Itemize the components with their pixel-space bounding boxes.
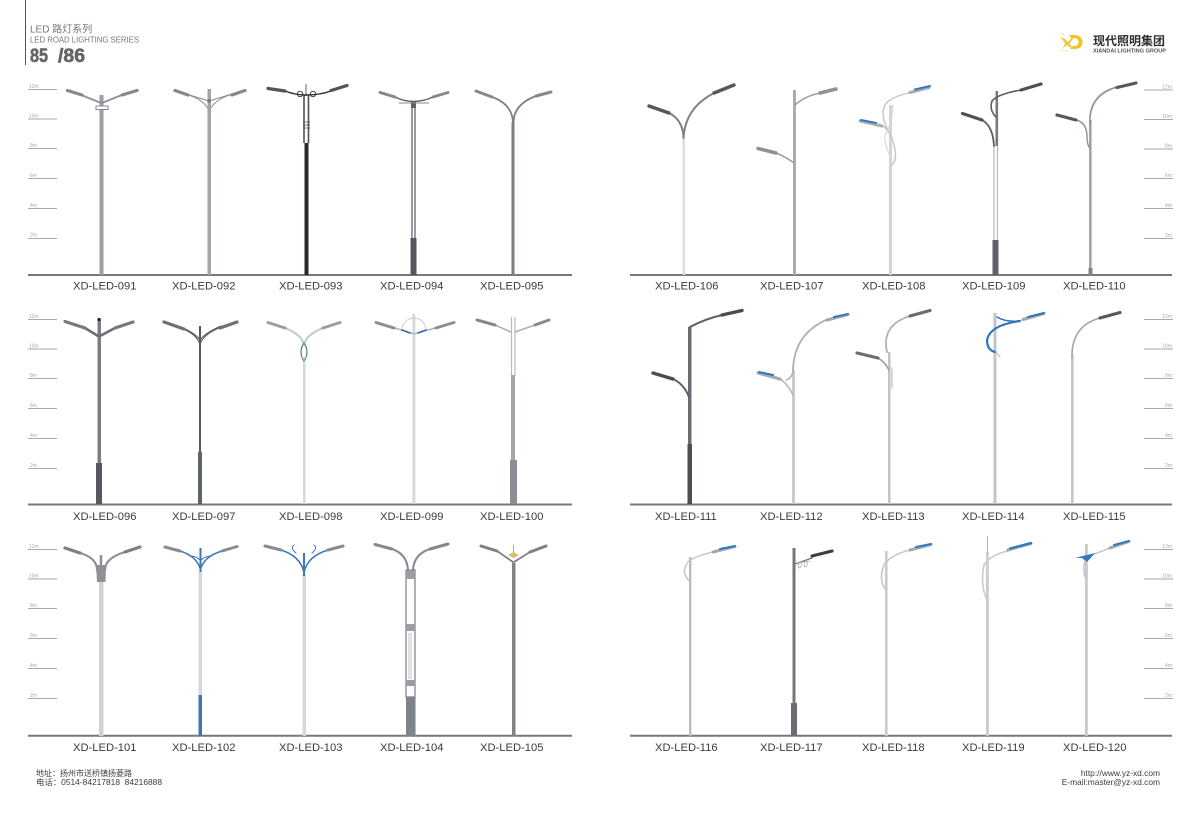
footer: address and phone: 电话：0514-84217818 84216888 <box>36 777 163 787</box>
lamp XD-LED-112 <box>758 314 848 504</box>
lamp XD-LED-113 <box>857 310 930 504</box>
label XD-LED-116: XD-LED-116 <box>655 742 718 754</box>
lamp XD-LED-092 <box>175 89 245 275</box>
row 3 right: ground line and height scale: 6m <box>1165 633 1172 639</box>
lamp XD-LED-118 <box>881 544 931 736</box>
row 3 right: ground line and height scale: 2m <box>1165 693 1172 699</box>
footer: website and email <box>1062 768 1160 787</box>
row 3 right: ground line and height scale <box>630 544 1173 736</box>
label XD-LED-120: XD-LED-120 <box>1063 742 1126 754</box>
row 3 left: ground line and height scale: 6m <box>30 633 37 639</box>
row 1 right: ground line and height scale: 4m <box>1165 203 1172 209</box>
lamp XD-LED-100 <box>477 317 549 504</box>
lamp XD-LED-106 <box>649 85 734 275</box>
footer: address and phone <box>36 768 163 787</box>
row 2 right: ground line and height scale: 12m <box>1162 314 1172 320</box>
row 3 left: ground line and height scale: 2m <box>30 693 37 699</box>
row 3 left: ground line and height scale <box>28 544 572 736</box>
row 2 left: ground line and height scale <box>28 314 572 504</box>
label XD-LED-095: XD-LED-095 <box>480 280 543 292</box>
row 1 right: ground line and height scale: 12m <box>1162 84 1172 90</box>
lamp XD-LED-107 <box>758 89 836 275</box>
row 2 left: ground line and height scale: 10m <box>29 344 39 350</box>
label XD-LED-098: XD-LED-098 <box>279 511 342 523</box>
row 1 left: ground line and height scale: 4m <box>30 203 37 209</box>
logo: Xiandai Lighting Group: 现代照明集团 <box>1093 32 1165 49</box>
lamp XD-LED-099 <box>376 314 454 504</box>
lamp XD-LED-102 <box>165 546 237 736</box>
lamp XD-LED-120 <box>1075 541 1129 736</box>
row 1 left: ground line and height scale <box>28 84 572 275</box>
footer: website and email: http://www.yz-xd.com <box>1081 768 1160 778</box>
row 1 right: ground line and height scale: 2m <box>1165 233 1172 239</box>
lamp XD-LED-098 <box>268 322 340 504</box>
label XD-LED-096: XD-LED-096 <box>73 511 136 523</box>
header: series title and page numbers: /86 <box>58 46 85 67</box>
label XD-LED-105: XD-LED-105 <box>480 742 543 754</box>
lamp XD-LED-116 <box>684 546 735 736</box>
logo: Xiandai Lighting Group: XIANDAI LIGHTING GROUP <box>1093 48 1166 54</box>
label XD-LED-102: XD-LED-102 <box>172 742 235 754</box>
label XD-LED-117: XD-LED-117 <box>760 742 823 754</box>
row 3 right: ground line and height scale: 4m <box>1165 663 1172 669</box>
lamp XD-LED-117 <box>791 548 832 736</box>
label XD-LED-101: XD-LED-101 <box>73 742 136 754</box>
label XD-LED-091: XD-LED-091 <box>73 280 136 292</box>
lamp XD-LED-114 <box>987 313 1044 504</box>
row 1 right: ground line and height scale: 10m <box>1162 114 1172 120</box>
label XD-LED-106: XD-LED-106 <box>655 280 718 292</box>
row 1 left: ground line and height scale: 10m <box>29 114 39 120</box>
row 1 right: ground line and height scale <box>630 84 1173 275</box>
row 2 right: ground line and height scale: 2m <box>1165 463 1172 469</box>
lamp XD-LED-096 <box>65 318 133 504</box>
row 1 left: ground line and height scale: 2m <box>30 232 37 238</box>
label XD-LED-118: XD-LED-118 <box>862 742 925 754</box>
lamp XD-LED-097 <box>164 322 237 504</box>
lamp XD-LED-103 <box>265 545 343 736</box>
lamp XD-LED-104 <box>375 544 448 736</box>
lamp XD-LED-115 <box>1071 312 1120 504</box>
lamp XD-LED-095 <box>476 91 551 275</box>
row 2 right: ground line and height scale: 6m <box>1165 403 1172 409</box>
label XD-LED-112: XD-LED-112 <box>760 511 823 523</box>
row 2 left: ground line and height scale: 12m <box>29 314 39 320</box>
row 1 left: ground line and height scale: 6m <box>30 173 37 179</box>
label XD-LED-100: XD-LED-100 <box>480 511 543 523</box>
label XD-LED-093: XD-LED-093 <box>279 280 342 292</box>
label XD-LED-108: XD-LED-108 <box>862 280 925 292</box>
header: series title and page numbers <box>26 0 139 67</box>
label XD-LED-113: XD-LED-113 <box>862 511 925 523</box>
row 2 right: ground line and height scale: 8m <box>1165 373 1172 379</box>
lamp XD-LED-109 <box>962 84 1041 275</box>
row 3 right: ground line and height scale: 8m <box>1165 603 1172 609</box>
lamp XD-LED-093 <box>268 84 347 275</box>
row 3 left: ground line and height scale: 8m <box>30 603 37 609</box>
row 2 left: ground line and height scale: 4m <box>30 433 37 439</box>
row 1 right: ground line and height scale: 6m <box>1165 173 1172 179</box>
row 2 left: ground line and height scale: 6m <box>30 403 37 409</box>
label XD-LED-109: XD-LED-109 <box>962 280 1025 292</box>
label XD-LED-107: XD-LED-107 <box>760 280 823 292</box>
label XD-LED-097: XD-LED-097 <box>172 511 235 523</box>
label XD-LED-110: XD-LED-110 <box>1063 280 1126 292</box>
lamp XD-LED-094 <box>380 92 448 275</box>
footer: website and email: E-mail:master@yz-xd.com <box>1062 777 1160 787</box>
label XD-LED-094: XD-LED-094 <box>380 280 443 292</box>
row 1 left: ground line and height scale: 8m <box>30 143 37 149</box>
footer: address and phone: 地址：扬州市送桥镇扬菱路 <box>36 768 132 778</box>
label XD-LED-099: XD-LED-099 <box>380 511 443 523</box>
label XD-LED-103: XD-LED-103 <box>279 742 342 754</box>
row 3 right: ground line and height scale: 12m <box>1162 544 1172 550</box>
row 2 right: ground line and height scale: 4m <box>1165 433 1172 439</box>
row 2 left: ground line and height scale: 2m <box>30 463 37 469</box>
row 2 right: ground line and height scale: 10m <box>1162 344 1172 350</box>
row 3 left: ground line and height scale: 4m <box>30 663 37 669</box>
header: series title and page numbers: LED ROAD LIGHTING SERIES <box>30 36 139 44</box>
label XD-LED-119: XD-LED-119 <box>962 742 1025 754</box>
label XD-LED-115: XD-LED-115 <box>1063 511 1126 523</box>
row 2 left: ground line and height scale: 8m <box>30 373 37 379</box>
row 1 right: ground line and height scale: 8m <box>1165 144 1172 150</box>
row 1 left: ground line and height scale: 12m <box>29 84 39 90</box>
label XD-LED-092: XD-LED-092 <box>172 280 235 292</box>
row 3 right: ground line and height scale: 10m <box>1162 574 1172 580</box>
label XD-LED-111: XD-LED-111 <box>655 511 717 523</box>
label XD-LED-104: XD-LED-104 <box>380 742 443 754</box>
row 3 left: ground line and height scale: 10m <box>29 574 39 580</box>
label XD-LED-114: XD-LED-114 <box>962 511 1025 523</box>
header: series title and page numbers: 85 <box>30 46 48 67</box>
lamp XD-LED-105 <box>481 545 546 736</box>
row 3 left: ground line and height scale: 12m <box>29 544 39 550</box>
lamp XD-LED-091 <box>68 90 137 275</box>
lamp XD-LED-101 <box>65 547 140 736</box>
lamp XD-LED-110 <box>1057 83 1136 275</box>
lamp XD-LED-111 <box>653 310 742 504</box>
lamp XD-LED-119 <box>983 536 1031 736</box>
logo: Xiandai Lighting Group <box>1060 32 1166 54</box>
header: series title and page numbers: LED 路灯系列 <box>30 22 92 36</box>
row 2 right: ground line and height scale <box>630 314 1173 504</box>
lamp XD-LED-108 <box>860 86 930 275</box>
